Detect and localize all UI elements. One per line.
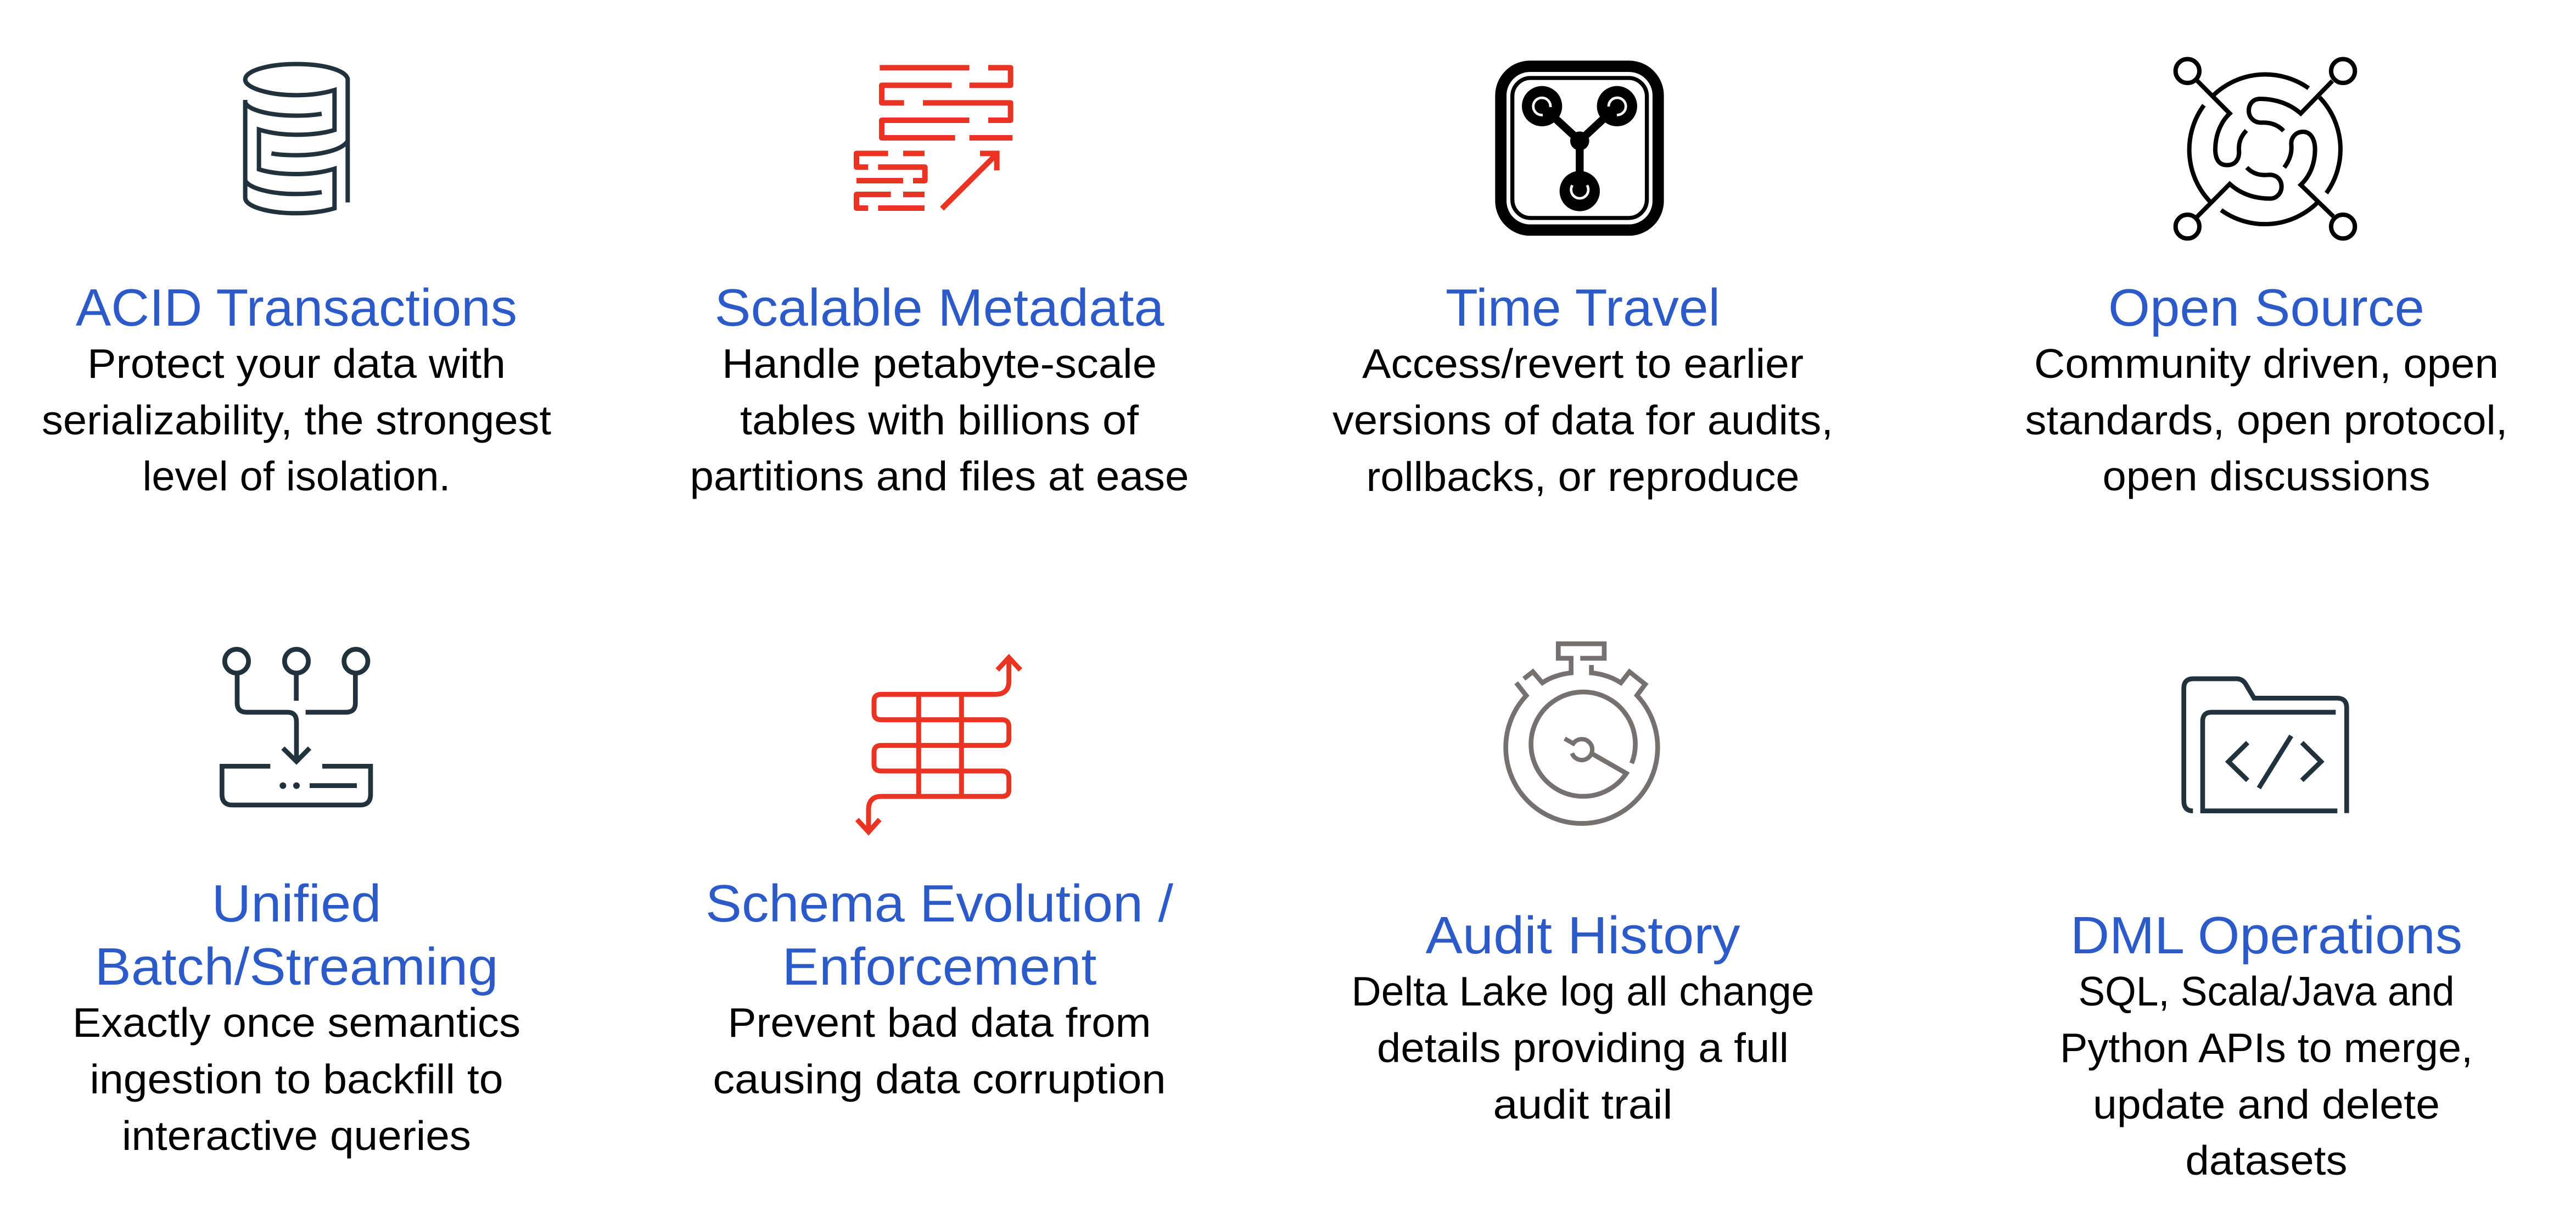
text: DML Operations description: Python APIs to merge,: [2060, 1025, 2473, 1071]
icon: open source circuit: [2176, 59, 2355, 238]
panel: Audit History: [1352, 644, 1814, 1127]
panel: Schema Evolution / Enforcement: [705, 657, 1173, 1102]
text: Open Source description: standards, open protocol,: [2025, 397, 2508, 443]
text: Open Source description: Community driven, open: [2034, 340, 2499, 387]
panel: Open Source: [2025, 59, 2508, 499]
heading: Unified Batch/Streaming: [94, 874, 498, 996]
heading: DML Operations: DML Operations: [2070, 906, 2462, 965]
heading: Time Travel: Time Travel: [1446, 278, 1720, 337]
heading: ACID Transactions: ACID Transactions: [76, 278, 517, 337]
heading: Schema Evolution / Enforcement: Schema Evolution /: [705, 874, 1173, 933]
text: Unified Batch/Streaming description: [72, 999, 520, 1159]
text: Time Travel description: rollbacks, or reproduce: [1366, 454, 1800, 500]
heading: Unified Batch/Streaming: Unified: [212, 874, 381, 933]
text: Time Travel description: [1332, 340, 1833, 500]
text: Time Travel description: Access/revert to earlier: [1362, 340, 1804, 387]
text: DML Operations description: datasets: [2185, 1137, 2348, 1183]
text: ACID description: level of isolation.: [143, 453, 450, 499]
icon: scaling maze with arrow: [856, 68, 1012, 209]
heading: Open Source: Open Source: [2108, 278, 2424, 337]
text: ACID description: Protect your data with: [87, 340, 506, 387]
text: Open Source description: [2025, 340, 2508, 499]
icon: database cylinder maze: [245, 64, 348, 213]
panel: Time Travel: [1332, 66, 1833, 500]
heading: Schema Evolution / Enforcement: [705, 874, 1173, 996]
heading: Scalable Metadata: Scalable Metadata: [715, 278, 1164, 337]
text: Schema Evolution description: [713, 999, 1166, 1102]
heading: Schema Evolution / Enforcement: Enforcement: [782, 937, 1097, 996]
icon: table with winding arrows: [857, 657, 1021, 832]
text: Schema Evolution description: Prevent bad data from: [728, 999, 1151, 1046]
icon: flux capacitor: [1501, 66, 1658, 230]
heading: Audit History: Audit History: [1425, 906, 1740, 965]
text: Scalable Metadata description: partitions and files at ease: [690, 453, 1189, 499]
panel: Unified Batch/Streaming: [72, 649, 520, 1159]
text: DML Operations description: update and delete: [2093, 1081, 2440, 1127]
panel: ACID Transactions: [42, 64, 551, 499]
text: Audit History description: [1352, 968, 1814, 1127]
text: ACID description: [42, 340, 551, 499]
text: ACID description: serializability, the strongest: [42, 397, 551, 443]
icon: stopwatch: [1506, 644, 1657, 824]
text: DML Operations description: [2060, 968, 2473, 1183]
text: Open Source description: open discussions: [2103, 453, 2430, 499]
text: Audit History description: Delta Lake log all change: [1352, 968, 1814, 1014]
text: Scalable Metadata description: [690, 340, 1189, 499]
text: Unified Batch/Streaming description: ingestion to backfill to: [90, 1056, 503, 1102]
icon: code folder: [2184, 679, 2347, 813]
panel: Scalable Metadata: [690, 68, 1189, 499]
panel: DML Operations: [2060, 679, 2473, 1183]
text: Audit History description: details providing a full: [1377, 1025, 1789, 1071]
text: Time Travel description: versions of data for audits,: [1332, 397, 1833, 443]
heading: Unified Batch/Streaming: Batch/Streaming: [94, 937, 498, 996]
text: DML Operations description: SQL, Scala/Java and: [2079, 968, 2454, 1014]
text: Audit History description: audit trail: [1493, 1081, 1672, 1127]
text: Unified Batch/Streaming description: Exactly once semantics: [72, 999, 520, 1046]
text: Schema Evolution description: causing data corruption: [713, 1056, 1166, 1102]
text: Unified Batch/Streaming description: interactive queries: [122, 1113, 471, 1159]
text: Scalable Metadata description: tables with billions of: [740, 397, 1139, 443]
text: Scalable Metadata description: Handle petabyte-scale: [722, 340, 1157, 387]
icon: merging streams into tray: [222, 649, 371, 805]
